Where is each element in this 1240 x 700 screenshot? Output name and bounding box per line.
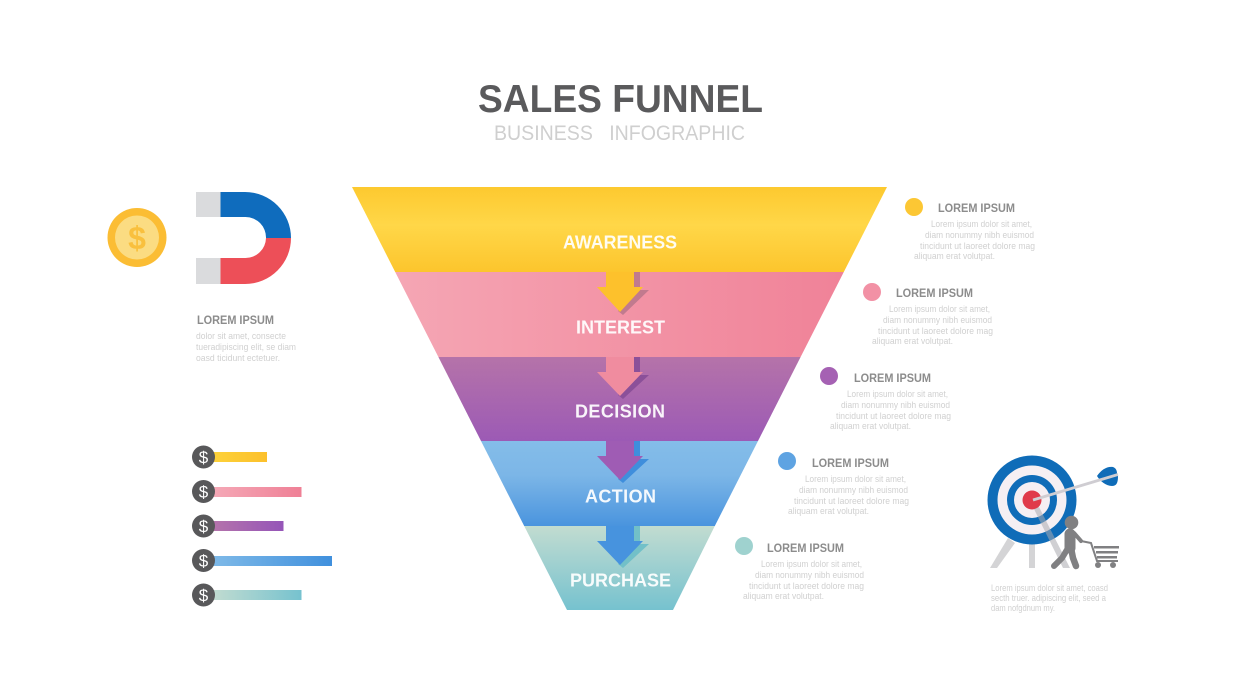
- heading: LOREM IPSUM: [896, 286, 973, 300]
- bar 4: $: [199, 552, 209, 570]
- right text block: [991, 583, 1108, 613]
- funnel band: decision: [438, 357, 801, 441]
- body text: [196, 331, 296, 364]
- bar 2: [192, 480, 302, 503]
- bar 4: [192, 549, 332, 572]
- heading: LOREM IPSUM: [767, 541, 844, 555]
- body text: aliquam erat volutpat.: [788, 506, 869, 517]
- icon: target with arrow and shopper: [988, 456, 1119, 568]
- arrow: interest to decision: [597, 357, 649, 399]
- dot: [863, 283, 881, 301]
- body text: tincidunt ut laoreet dolore mag: [920, 241, 1035, 252]
- body text: oasd ticidunt ectetuer.: [196, 353, 280, 364]
- callout: awareness: [905, 198, 1035, 262]
- dart: [1033, 467, 1118, 500]
- shopping cart: [1094, 546, 1119, 568]
- arrow: decision to action: [597, 441, 649, 483]
- dot: [778, 452, 796, 470]
- bar 3: $: [199, 517, 209, 536]
- callout: purchase: [735, 537, 864, 602]
- right target leg: [1034, 507, 1070, 568]
- bar chart: [192, 446, 332, 606]
- heading: LOREM IPSUM: [812, 456, 889, 470]
- callout: action: [778, 452, 909, 517]
- shopper: [1054, 516, 1118, 566]
- heading: LOREM IPSUM: [938, 201, 1015, 215]
- target rings: [988, 456, 1076, 544]
- body text: aliquam erat volutpat.: [830, 421, 911, 432]
- label: interest: INTEREST: [576, 318, 665, 338]
- body text: Lorem ipsum dolor sit amet,: [761, 559, 862, 570]
- body text: aliquam erat volutpat.: [743, 591, 824, 602]
- right text block: dam nofgdnum my.: [991, 603, 1055, 613]
- bar 1: $: [199, 448, 209, 467]
- bar 1: [192, 446, 267, 468]
- body text: [743, 559, 864, 602]
- body text: Lorem ipsum dolor sit amet,: [889, 304, 990, 315]
- arrow: action to purchase: [597, 526, 649, 568]
- dot: [735, 537, 753, 555]
- title: SALES FUNNEL: [478, 78, 763, 121]
- body text: diam nonummy nibh euismod: [755, 570, 864, 581]
- funnel band: interest: [395, 272, 844, 357]
- body text: diam nonummy nibh euismod: [925, 230, 1034, 241]
- body text: Lorem ipsum dolor sit amet,: [931, 219, 1032, 230]
- label: awareness: AWARENESS: [563, 232, 677, 252]
- dot: [820, 367, 838, 385]
- icon: dollar coin: $: [128, 220, 146, 256]
- body text: tincidunt ut laoreet dolore mag: [878, 326, 993, 337]
- bar 3: [192, 514, 284, 538]
- body text: [872, 304, 993, 347]
- body text: [788, 474, 909, 517]
- body text: Lorem ipsum dolor sit amet,: [805, 474, 906, 485]
- body text: [914, 219, 1035, 262]
- left text block: [196, 313, 296, 364]
- funnel band: purchase: [524, 526, 715, 610]
- body text: Lorem ipsum dolor sit amet,: [847, 389, 948, 400]
- body text: tincidunt ut laoreet dolore mag: [749, 581, 864, 592]
- target legs: [990, 538, 1035, 568]
- right text block: Lorem ipsum dolor sit amet, coasd: [991, 583, 1108, 593]
- body text: dolor sit amet, consecte: [196, 331, 286, 342]
- icon: dollar coin: [108, 208, 166, 267]
- arrow: awareness to interest: [597, 272, 649, 315]
- funnel band: action: [481, 441, 758, 526]
- dot: [905, 198, 923, 216]
- icon: magnet: [196, 192, 291, 284]
- body text: tueradipiscing elit, se diam: [196, 342, 296, 353]
- body text: [830, 389, 951, 432]
- funnel: [352, 187, 887, 610]
- heading: LOREM IPSUM: [854, 371, 931, 385]
- bar 5: $: [199, 586, 209, 605]
- label: purchase: PURCHASE: [570, 570, 671, 590]
- label: action: ACTION: [585, 486, 656, 506]
- label: decision: DECISION: [575, 402, 665, 422]
- body text: tincidunt ut laoreet dolore mag: [794, 496, 909, 507]
- funnel band: awareness: [352, 187, 887, 272]
- body text: aliquam erat volutpat.: [872, 336, 953, 347]
- subtitle: BUSINESS INFOGRAPHIC: [494, 121, 745, 145]
- body text: diam nonummy nibh euismod: [799, 485, 908, 496]
- bar 5: [192, 584, 302, 606]
- right text block: secth truer. adipiscing elit, seed a: [991, 593, 1106, 603]
- body text: diam nonummy nibh euismod: [841, 400, 950, 411]
- callout: decision: [820, 367, 951, 432]
- body text: diam nonummy nibh euismod: [883, 315, 992, 326]
- body text: tincidunt ut laoreet dolore mag: [836, 411, 951, 422]
- bar 2: $: [199, 482, 209, 502]
- heading: LOREM IPSUM: [197, 313, 274, 327]
- body text: aliquam erat volutpat.: [914, 251, 995, 262]
- callout: interest: [863, 283, 993, 347]
